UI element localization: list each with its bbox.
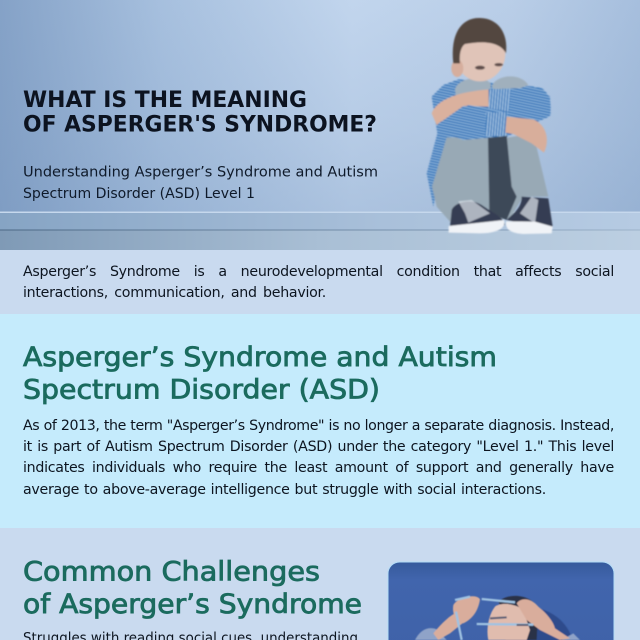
photo: boy sitting against wall (427, 18, 553, 234)
panel: Asperger's and ASD (0, 314, 640, 528)
shirt back (427, 79, 551, 207)
photo: boy with string (388, 562, 614, 640)
heading: Common Challenges (23, 556, 320, 588)
title: OF ASPERGER'S SYNDROME? (23, 112, 377, 138)
subtitle (23, 164, 378, 202)
subtitle: Understanding Asperger’s Syndrome and Autism (23, 164, 378, 180)
body text: indicates individuals who require the least amount of support and generally have (23, 460, 614, 476)
definition text: Asperger’s Syndrome is a neurodevelopmental condition that affects social (23, 264, 614, 280)
definition text: interactions, communication, and behavior. (23, 285, 326, 301)
heading (22, 342, 497, 406)
title (23, 88, 377, 138)
trousers (432, 133, 548, 222)
head (455, 25, 505, 81)
hero panel (0, 0, 640, 250)
shoes (450, 201, 505, 227)
body text: it is part of Autism Spectrum Disorder (ASD) under the category "Level 1." This level (23, 439, 614, 455)
subtitle: Spectrum Disorder (ASD) Level 1 (23, 186, 255, 202)
heading: of Asperger’s Syndrome (23, 589, 362, 620)
panel: definition (0, 250, 640, 314)
body text (23, 418, 614, 498)
heading: Asperger’s Syndrome and Autism (23, 342, 497, 373)
arms (432, 89, 490, 125)
heading (23, 556, 362, 620)
heading: Spectrum Disorder (ASD) (23, 374, 380, 406)
panel: common challenges (24, 560, 614, 640)
definition text (23, 264, 614, 301)
knees (455, 78, 491, 100)
body text: As of 2013, the term "Asperger’s Syndrome" is no longer a separate diagnosis. Instead, (23, 418, 614, 434)
body text: average to above-average intelligence but struggle with social interactions. (23, 482, 546, 498)
title: WHAT IS THE MEANING (23, 88, 307, 113)
